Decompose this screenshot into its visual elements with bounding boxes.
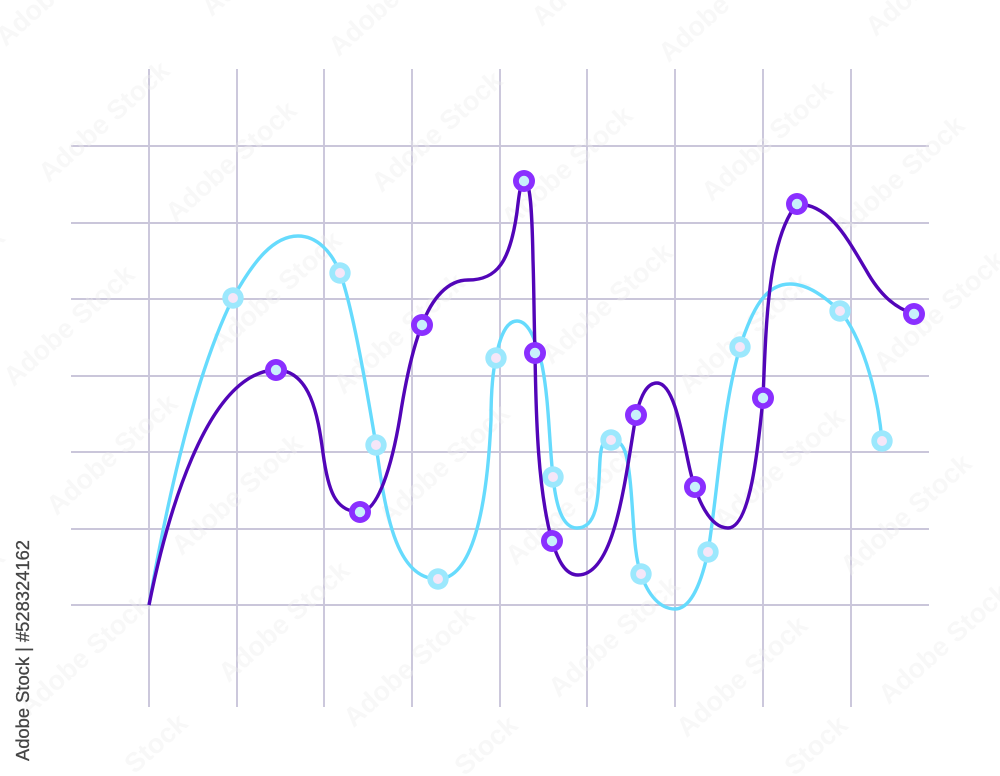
stock watermark pattern: Adobe Stock bbox=[696, 73, 839, 207]
stock watermark pattern: Adobe Stock bbox=[673, 266, 816, 400]
stock watermark pattern: Adobe Stock bbox=[328, 266, 471, 400]
purple data markers bbox=[265, 170, 925, 552]
stock watermark pattern: Adobe Stock bbox=[160, 94, 303, 228]
stock watermark pattern: Adobe Stock bbox=[0, 258, 141, 392]
stock watermark pattern: Adobe Stock bbox=[373, 397, 516, 531]
stock watermark pattern: Adobe Stock bbox=[500, 437, 643, 571]
stock watermark pattern: Adobe Stock bbox=[828, 109, 971, 243]
stock watermark pattern: Adobe Stock bbox=[213, 554, 356, 688]
stock watermark pattern: Adobe Stock bbox=[13, 588, 156, 722]
stock watermark pattern: Adobe Stock bbox=[671, 609, 814, 743]
stock watermark pattern: Adobe Stock bbox=[835, 447, 978, 581]
stock watermark pattern: Adobe Stock bbox=[366, 64, 509, 198]
stock id caption: Adobe Stock | #528324162 bbox=[13, 540, 33, 761]
cyan data markers bbox=[222, 262, 893, 590]
stock watermark pattern: Adobe Stock bbox=[708, 401, 851, 535]
stock watermark pattern: Adobe Stock bbox=[205, 224, 348, 358]
stock watermark pattern: Adobe Stock bbox=[543, 569, 686, 703]
stock watermark pattern: Adobe Stock bbox=[338, 599, 481, 733]
purple data line bbox=[149, 181, 914, 605]
stock watermark pattern: Adobe Stock bbox=[41, 387, 184, 521]
stock watermark pattern: Adobe Stock bbox=[166, 427, 309, 561]
stock watermark pattern: Adobe Stock bbox=[33, 54, 176, 188]
stock watermark pattern: Adobe Stock bbox=[496, 99, 639, 233]
cyan data line bbox=[149, 236, 882, 609]
stock watermark pattern: Adobe Stock bbox=[536, 236, 679, 370]
